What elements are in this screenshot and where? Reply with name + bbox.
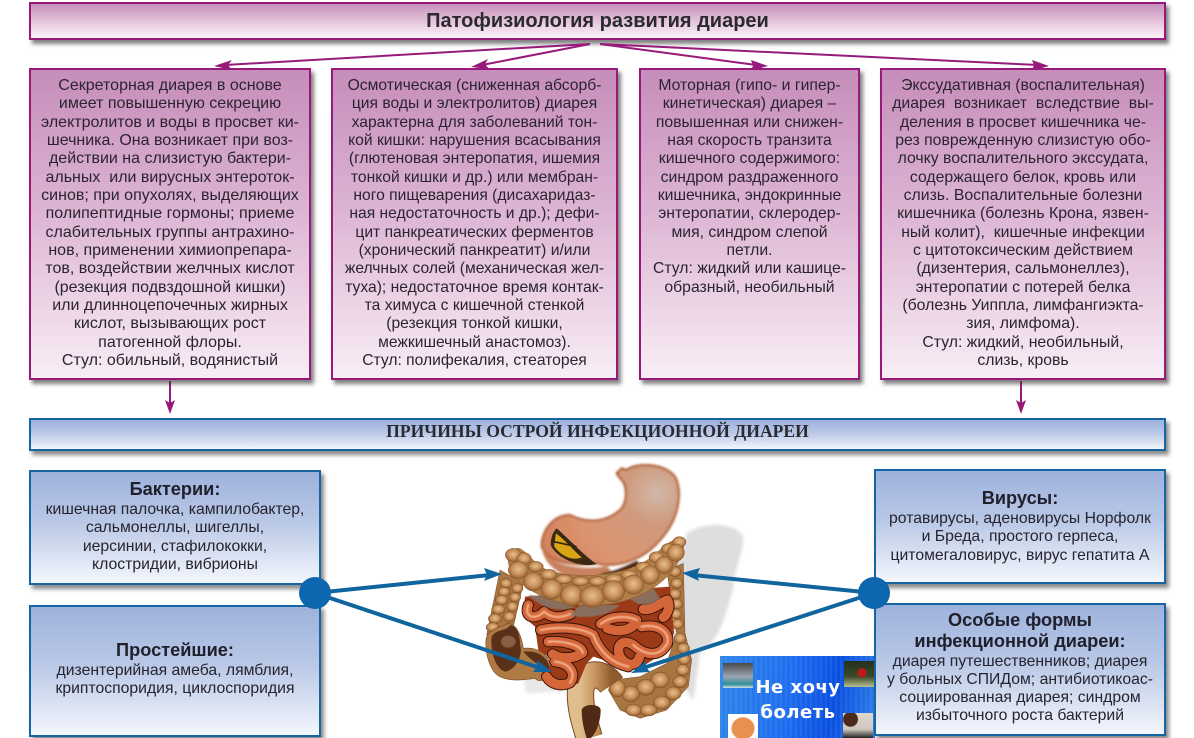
transverse colon bbox=[505, 537, 686, 607]
panel: exudative diarrhea: лочку воспалительного экссудата, bbox=[898, 150, 1148, 167]
panel: osmotic diarrhea: та химуса с кишечной стенкой bbox=[365, 297, 584, 314]
box: bacteria: сальмонеллы, шигеллы, bbox=[86, 519, 264, 536]
box: viruses: ротавирусы, аденовирусы Норфолк bbox=[889, 510, 1151, 527]
panel: secretory diarrhea: нов, применении химиопрепара- bbox=[48, 242, 292, 259]
box: bacteria: иерсинии, стафилококки, bbox=[83, 538, 267, 555]
panel: exudative diarrhea: рез поврежденную слизистую обо- bbox=[895, 132, 1151, 149]
box: special forms bbox=[874, 603, 1166, 736]
box: special forms: диарея путешественников; диарея bbox=[893, 653, 1147, 670]
panel: secretory diarrhea: (резекция подвздошной кишки) bbox=[54, 279, 286, 296]
panel: osmotic diarrhea: тонкой кишки и др.) или мембран- bbox=[351, 169, 598, 186]
panel: secretory diarrhea: действии на слизистую бактери- bbox=[49, 150, 291, 167]
panel: osmotic diarrhea: (глютеновая энтеропатия, ишемия bbox=[349, 150, 600, 167]
panel: exudative diarrhea: зия, лимфома). bbox=[966, 315, 1080, 332]
panel: motor diarrhea: энтеропатии, склеродер- bbox=[658, 205, 841, 222]
panel: motor diarrhea: кинетическая) диарея – bbox=[663, 95, 836, 112]
photo: back pain bbox=[728, 714, 758, 738]
panel: osmotic diarrhea: (хронический панкреатит) и/или bbox=[359, 242, 590, 259]
box: special forms: инфекционной диареи: bbox=[914, 631, 1126, 651]
panel: osmotic diarrhea: желчных солей (механическая жел- bbox=[345, 260, 604, 277]
panel: motor diarrhea: петли. bbox=[726, 242, 772, 259]
box: protozoa: дизентерийная амеба, лямблия, bbox=[57, 662, 293, 679]
box: viruses bbox=[874, 469, 1166, 584]
panel: osmotic diarrhea: межкишечный анастомоз). bbox=[378, 334, 571, 351]
panel: exudative diarrhea bbox=[880, 68, 1166, 380]
panel: exudative diarrhea: диарея возникает вследствие вы- bbox=[892, 95, 1154, 112]
panel: secretory diarrhea: тов, воздействии желчных кислот bbox=[45, 260, 295, 277]
section heading bar bbox=[29, 418, 1166, 451]
box: special forms: у больных СПИДом; антибиотикоас- bbox=[887, 671, 1153, 688]
panel: secretory diarrhea: альных или вирусных энтероток- bbox=[45, 169, 295, 186]
box: bacteria: кишечная палочка, кампилобактер, bbox=[46, 501, 304, 518]
panel: secretory diarrhea: синов; при опухолях, выделяющих bbox=[41, 187, 299, 204]
panel: secretory diarrhea: или длинноцепочечных жирных bbox=[52, 297, 288, 314]
panel: osmotic diarrhea bbox=[331, 68, 618, 380]
panel: secretory diarrhea: шечника. Она возникает при воз- bbox=[47, 132, 293, 149]
panel: secretory diarrhea: патогенной флоры. bbox=[98, 334, 242, 351]
panel: secretory diarrhea: электролитов и воды в просвет ки- bbox=[41, 114, 299, 131]
panel: motor diarrhea: ная скорость транзита bbox=[667, 132, 832, 149]
rectum bbox=[580, 675, 612, 738]
panel: motor diarrhea: кишечного содержимого: bbox=[659, 150, 840, 167]
box: special forms: избыточного роста бактерий bbox=[916, 707, 1124, 724]
section heading bar: ПРИЧИНЫ ОСТРОЙ ИНФЕКЦИОННОЙ ДИАРЕИ bbox=[386, 421, 809, 441]
small intestine bbox=[523, 587, 674, 690]
box: special forms: Особые формы bbox=[948, 610, 1092, 630]
title banner: Патофизиология развития диареи bbox=[426, 10, 769, 32]
panel: osmotic diarrhea: Осмотическая (сниженная абсорб- bbox=[348, 77, 601, 94]
panel: motor diarrhea: Стул: жидкий или кашице- bbox=[653, 260, 846, 277]
panel: exudative diarrhea: Экссудативная (воспалительная) bbox=[901, 77, 1145, 94]
box: bacteria bbox=[29, 470, 321, 585]
panel: motor diarrhea: мия, синдром слепой bbox=[671, 224, 828, 241]
box: bacteria: Бактерии: bbox=[130, 479, 220, 499]
panel: osmotic diarrhea: кой кишки: нарушения всасывания bbox=[348, 132, 601, 149]
box: protozoa: Простейшие: bbox=[116, 640, 234, 660]
panel: exudative diarrhea: (болезнь Уиппла, лимфангиэкта- bbox=[902, 297, 1144, 314]
panel: secretory diarrhea bbox=[29, 68, 311, 380]
panel: exudative diarrhea: слизь. Воспалительные болезни bbox=[904, 187, 1142, 204]
box: protozoa: криптоспоридия, циклоспоридия bbox=[55, 680, 294, 697]
advertising badge bbox=[720, 656, 875, 738]
panel: exudative diarrhea: деления в просвет кишечника че- bbox=[900, 114, 1146, 131]
pancreas glimpse bbox=[551, 528, 597, 565]
omentum shade bbox=[528, 588, 660, 617]
panel: exudative diarrhea: с цитотоксическим действием bbox=[913, 242, 1133, 259]
panel: motor diarrhea: повышенная или снижен- bbox=[656, 114, 843, 131]
box: bacteria: клостридии, вибрионы bbox=[92, 556, 258, 573]
panel: secretory diarrhea: Стул: обильный, водянистый bbox=[62, 352, 278, 369]
connector node right bbox=[858, 577, 890, 609]
panel: secretory diarrhea: Секреторная диарея в основе bbox=[58, 77, 282, 94]
photo: woman bbox=[843, 713, 873, 738]
panel: osmotic diarrhea: характерна для заболеваний тон- bbox=[352, 114, 597, 131]
box: special forms: социированная диарея; синдром bbox=[899, 689, 1141, 706]
badge text: болеть bbox=[760, 702, 836, 723]
panel: osmotic diarrhea: цит панкреатических ферментов bbox=[355, 224, 594, 241]
box: viruses: Вирусы: bbox=[982, 488, 1058, 508]
panel: osmotic diarrhea: ная недостаточность и др.); дефи- bbox=[349, 205, 600, 222]
panel: secretory diarrhea: кислот, вызывающих рост bbox=[74, 315, 266, 332]
panel: exudative diarrhea: кишечника (болезнь Крона, язвен- bbox=[897, 205, 1149, 222]
illustration: digestive organs bbox=[486, 462, 744, 738]
photo: runner bbox=[844, 661, 874, 687]
panel: exudative diarrhea: содержащего белок, кровь или bbox=[910, 169, 1136, 186]
organ shadow bbox=[517, 525, 743, 700]
connector node left bbox=[299, 577, 331, 609]
panel: motor diarrhea: синдром раздраженного bbox=[661, 169, 838, 186]
panel: motor diarrhea bbox=[639, 68, 860, 380]
panel: osmotic diarrhea: (резекция тонкой кишки, bbox=[386, 315, 563, 332]
panel: exudative diarrhea: Стул: жидкий, необильный, bbox=[922, 334, 1124, 351]
panel: motor diarrhea: кишечника, эндокринные bbox=[658, 187, 841, 204]
descending colon and rectum bbox=[608, 563, 692, 718]
badge text: Не хочу bbox=[755, 677, 841, 698]
panel: osmotic diarrhea: Стул: полифекалия, стеаторея bbox=[362, 352, 587, 369]
box: protozoa bbox=[29, 605, 321, 737]
panel: exudative diarrhea: слизь, кровь bbox=[977, 352, 1069, 369]
box: viruses: цитомегаловирус, вирус гепатита А bbox=[890, 547, 1150, 564]
panel: motor diarrhea: образный, необильный bbox=[664, 279, 835, 296]
panel: secretory diarrhea: имеет повышенную секрецию bbox=[59, 95, 281, 112]
panel: secretory diarrhea: слабительных группы антрахино- bbox=[46, 224, 294, 241]
panel: osmotic diarrhea: ция воды и электролитов) диарея bbox=[352, 95, 597, 112]
panel: secretory diarrhea: полипептидные гормоны; приеме bbox=[46, 205, 294, 222]
esophagus stub bbox=[617, 468, 630, 481]
panel: exudative diarrhea: ный колит), кишечные инфекции bbox=[901, 224, 1145, 241]
badge text bbox=[755, 677, 841, 723]
cecum bbox=[486, 623, 552, 681]
stomach bbox=[542, 465, 679, 580]
box: viruses: и Бреда, простого герпеса, bbox=[922, 528, 1118, 545]
panel: exudative diarrhea: энтеропатии с потерей белка bbox=[916, 279, 1130, 296]
panel: exudative diarrhea: (дизентерия, сальмонеллез), bbox=[916, 260, 1130, 277]
panel: osmotic diarrhea: ного пищеварения (дисахаридаз- bbox=[353, 187, 596, 204]
panel: osmotic diarrhea: туха); недостаточное время контак- bbox=[345, 279, 604, 296]
ascending colon bbox=[486, 570, 523, 635]
title banner bbox=[29, 2, 1166, 40]
photo: gym bbox=[723, 663, 753, 688]
panel: motor diarrhea: Моторная (гипо- и гипер- bbox=[658, 77, 841, 94]
